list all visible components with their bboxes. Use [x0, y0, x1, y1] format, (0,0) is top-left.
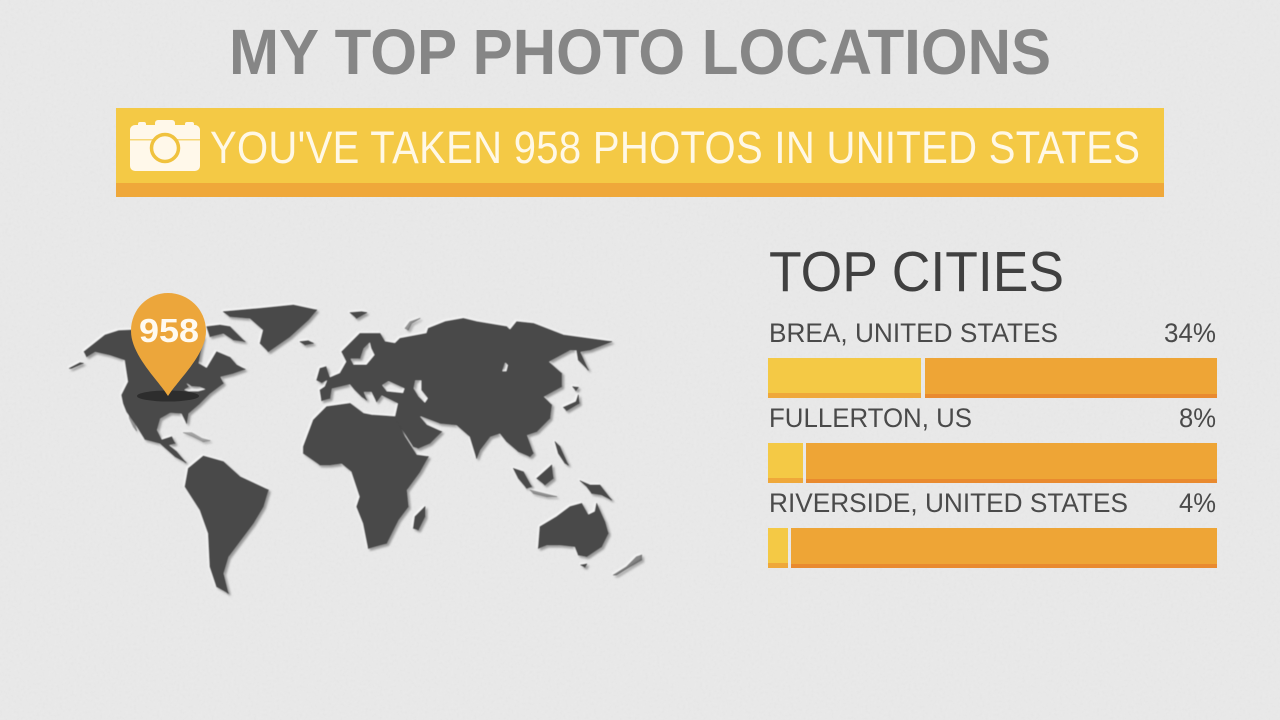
marker pin	[131, 293, 206, 396]
city row: Brea	[768, 318, 1217, 398]
sumatra	[513, 468, 532, 488]
alaskan islands	[69, 363, 83, 368]
city row: Riverside: RIVERSIDE, UNITED STATES	[769, 488, 1128, 518]
africa	[303, 403, 428, 548]
eurasia	[320, 318, 612, 458]
java	[530, 490, 557, 497]
city row: Riverside: 4%	[1179, 488, 1216, 518]
city row: Fullerton: 8%	[1179, 403, 1216, 433]
heading: top cities: TOP CITIES	[769, 240, 1064, 304]
borneo	[537, 465, 553, 485]
japan	[563, 387, 579, 411]
city row: Brea: BREA, UNITED STATES	[769, 318, 1058, 348]
city row: Fullerton: FULLERTON, US	[769, 403, 972, 433]
banner bottom strip	[116, 183, 1164, 197]
title: MY TOP PHOTO LOCATIONS	[229, 16, 1051, 88]
banner text: YOU'VE TAKEN 958 PHOTOS IN UNITED STATES	[210, 123, 1140, 174]
madagascar	[413, 507, 425, 530]
americas and greenland	[69, 305, 317, 593]
iceland	[300, 341, 313, 345]
city row: Riverside	[768, 488, 1217, 568]
russian arctic islands	[405, 318, 420, 330]
arctic islands	[207, 325, 245, 342]
world map	[69, 305, 642, 593]
old world	[303, 312, 642, 575]
caribbean islands	[183, 433, 210, 442]
map marker	[131, 293, 206, 402]
north america	[84, 330, 245, 463]
philippines	[555, 442, 568, 465]
tasmania	[581, 564, 587, 567]
marker count: 958	[139, 312, 199, 349]
city row: Brea: 34%	[1164, 318, 1216, 348]
panel: top cities list	[768, 318, 1217, 568]
banner	[116, 108, 1164, 197]
british isles	[317, 367, 330, 383]
marker shadow	[137, 390, 199, 402]
baja california	[129, 413, 137, 431]
icon: camera	[130, 120, 200, 171]
city row: Fullerton	[768, 403, 1217, 483]
banner background	[116, 108, 1164, 183]
south america	[185, 456, 268, 593]
new guinea	[580, 481, 612, 500]
new zealand	[613, 555, 642, 575]
australia	[538, 503, 608, 557]
svalbard	[350, 312, 367, 318]
greenland	[223, 305, 317, 352]
